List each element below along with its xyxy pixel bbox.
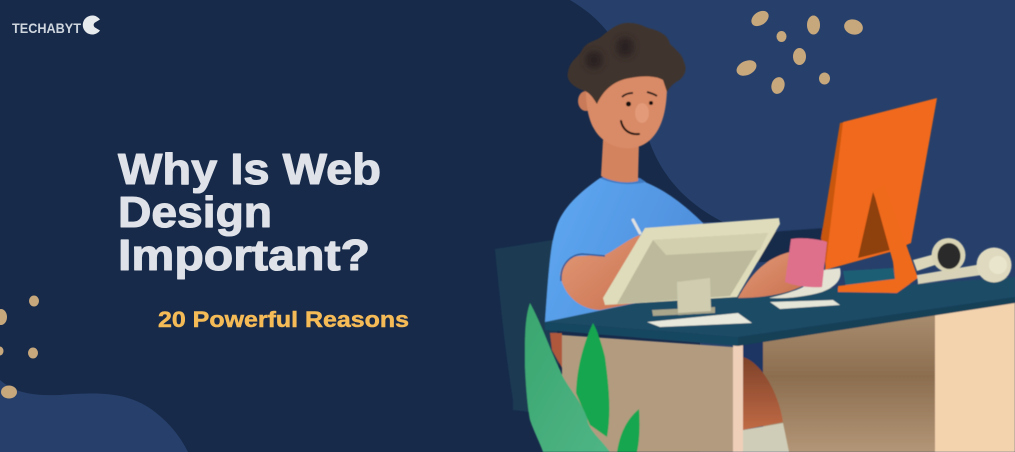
hair — [568, 23, 686, 104]
subtitle: 20 Powerful Reasons — [158, 307, 409, 332]
orange monitor — [821, 98, 937, 293]
beige monitor back — [603, 218, 780, 316]
gap behind legs — [743, 342, 763, 382]
mug — [785, 238, 827, 287]
desk top — [545, 277, 1015, 346]
stand — [677, 278, 711, 315]
paper near mug — [770, 300, 840, 309]
eyes — [626, 102, 631, 106]
stand — [838, 185, 918, 293]
title — [118, 145, 381, 280]
background blob: top right — [570, 0, 1015, 452]
person: collar — [600, 176, 646, 184]
eyebrows — [622, 92, 657, 97]
screen back — [825, 98, 937, 270]
person: head — [568, 23, 686, 148]
teal through stand — [843, 268, 897, 287]
logo: TECHABYT — [12, 21, 82, 36]
person: shirt — [545, 178, 703, 322]
logo — [12, 16, 100, 36]
person: far arm — [738, 252, 805, 298]
back band behind monitor — [745, 228, 825, 262]
right end panel — [935, 300, 1015, 452]
middle leaf — [576, 323, 609, 437]
person: near arm — [560, 235, 650, 310]
skin below desk — [550, 333, 562, 368]
icon: logo pac-man — [83, 16, 100, 34]
stand shadow — [858, 192, 890, 258]
background blob: bottom left — [0, 380, 188, 452]
ear — [578, 91, 594, 111]
smile — [621, 121, 639, 134]
face — [586, 70, 667, 148]
person: leg — [743, 357, 789, 452]
person: neck — [601, 140, 639, 182]
headphones — [913, 238, 1012, 284]
title: Design — [118, 188, 272, 237]
title: Important? — [118, 231, 370, 280]
sleeve edge — [561, 254, 605, 281]
nose — [635, 103, 649, 123]
plant — [525, 303, 640, 452]
small leaf — [617, 409, 640, 452]
pen — [633, 220, 640, 233]
large leaf — [525, 303, 610, 452]
white cuff — [769, 268, 841, 298]
left panel edge — [733, 344, 743, 452]
screen side — [821, 122, 845, 270]
illustration: developer at desk — [495, 23, 1015, 452]
decorative dots: left — [0, 296, 39, 398]
paper on desk — [647, 313, 752, 327]
right panel — [763, 315, 935, 452]
left panel — [562, 335, 733, 452]
chair — [495, 240, 560, 412]
desk legs and panels — [562, 300, 1015, 452]
decorative dots: top right — [734, 8, 865, 95]
title: Why Is Web — [118, 145, 381, 194]
